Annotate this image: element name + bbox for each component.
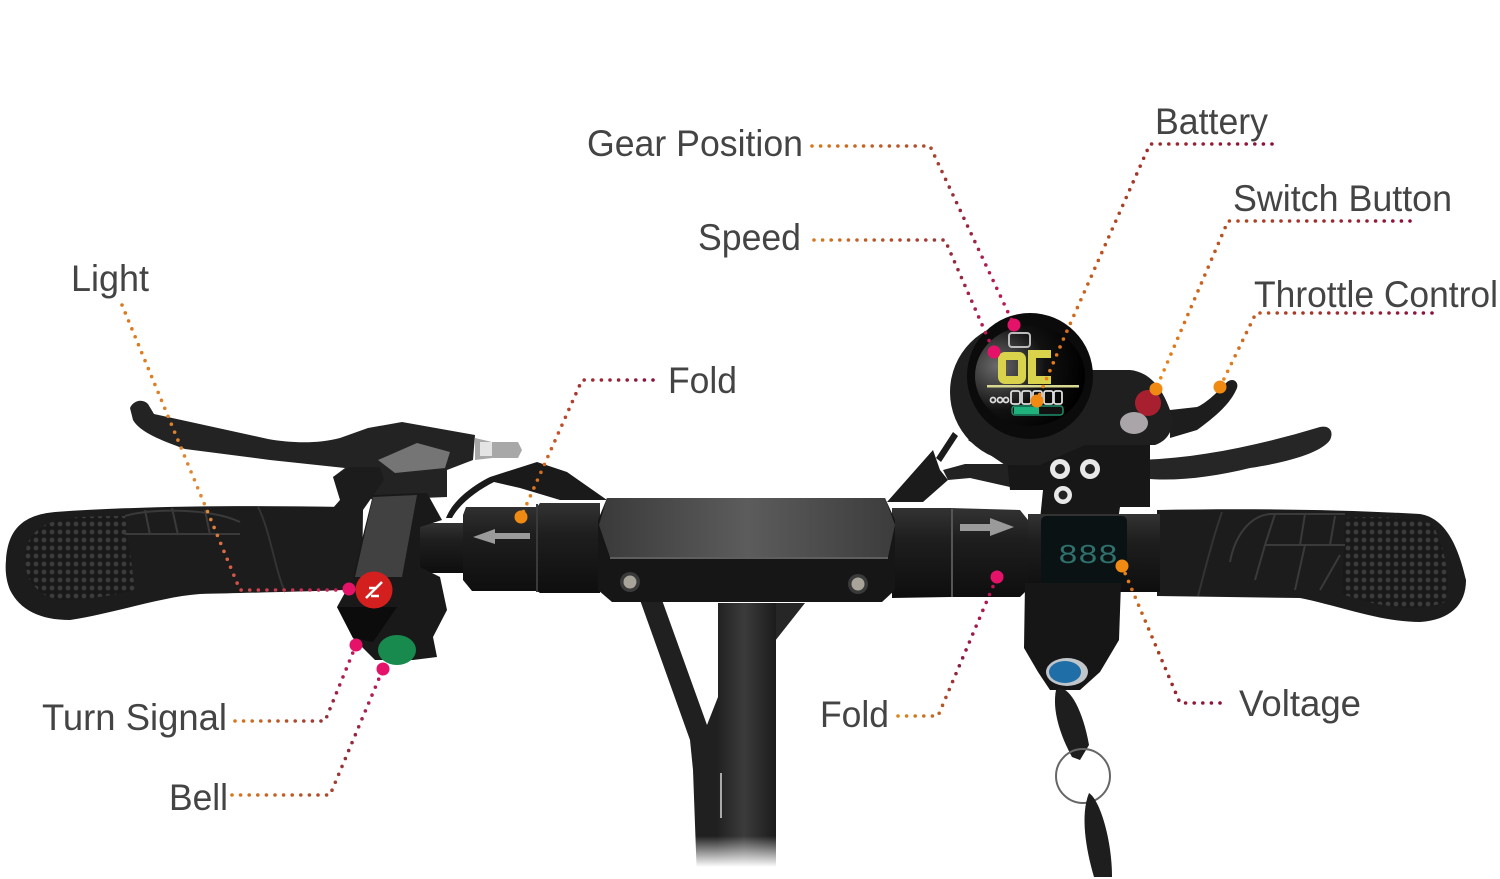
voltage digits: 888 (1058, 542, 1118, 572)
left handlebar tube and folding collar (420, 503, 600, 593)
display unit (950, 313, 1172, 465)
callout: throttle control (1214, 274, 1498, 394)
icon: red light button (356, 572, 392, 608)
divider line on screen (987, 385, 1079, 388)
key and fobs (1055, 688, 1112, 877)
callout: gear position: Gear Position (587, 123, 803, 164)
callout: speed: Speed (698, 217, 801, 258)
gear indicator (1009, 333, 1030, 347)
callout: bell: Bell (169, 777, 228, 818)
callout: switch button (1150, 178, 1452, 396)
callout: light (71, 258, 356, 596)
stem with cables (640, 600, 805, 879)
callout: voltage: Voltage (1239, 683, 1361, 724)
right grip (1157, 509, 1466, 622)
left switch housing (325, 467, 447, 665)
voltmeter and ignition lock (1024, 516, 1127, 690)
callout: fold left (514, 360, 737, 524)
battery bar (1012, 406, 1063, 415)
left brake lever (130, 401, 607, 518)
throttle thumb lever (1170, 380, 1237, 438)
callout: light: Light (71, 258, 150, 299)
handlebar tube right of centre (1028, 514, 1160, 592)
callout: fold left: Fold (668, 360, 737, 401)
callout: fold right: Fold (820, 694, 889, 735)
callout: battery (1030, 101, 1272, 408)
callout: voltage (1116, 560, 1361, 724)
display mount with bolts (1005, 440, 1150, 520)
callout: gear position (587, 123, 1020, 332)
icon: left arrow (473, 529, 530, 544)
icon: right arrow (960, 518, 1014, 536)
callout: fold right (820, 570, 1004, 735)
LCD screen (975, 326, 1085, 426)
callout: turn signal: Turn Signal (42, 697, 227, 738)
right brake lever and left cables (887, 427, 1332, 502)
callout: switch button: Switch Button (1233, 178, 1452, 219)
odometer row (990, 391, 1062, 404)
callout: battery: Battery (1155, 101, 1268, 142)
icon: mode button (1120, 412, 1148, 434)
icon: green bell button (378, 635, 416, 665)
speed digits (1002, 354, 1051, 380)
callout: bell (169, 662, 390, 818)
right handlebar tube and folding collar (892, 508, 1032, 598)
left grip (6, 506, 345, 620)
callout: speed (698, 217, 1000, 358)
icon: red power button (1135, 390, 1161, 416)
callout: turn signal (42, 638, 362, 738)
centre folding block (598, 498, 895, 602)
